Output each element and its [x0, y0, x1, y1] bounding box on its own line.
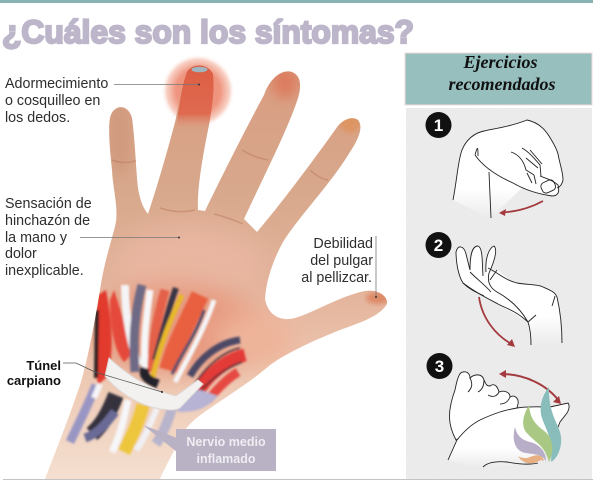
callout: carpal tunnel: carpiano	[7, 373, 61, 388]
top teal strip	[0, 0, 593, 3]
callout: swelling: Sensación de	[5, 196, 92, 212]
callout: swelling: dolor	[5, 246, 37, 262]
exercise 1	[453, 120, 563, 218]
callout: thumb weakness	[301, 236, 377, 298]
exercise 3	[448, 372, 569, 467]
callout: numbness: o cosquilleo en	[5, 93, 100, 109]
callout: carpal tunnel	[7, 358, 163, 393]
callout: thumb weakness: Debilidad	[313, 236, 373, 252]
number badge 1	[426, 112, 452, 138]
arrow 2	[479, 297, 513, 345]
white carpal ligament band	[105, 358, 203, 410]
callout: carpal tunnel: Túnel	[26, 358, 61, 373]
arrow 1	[501, 201, 543, 212]
callout: thumb weakness: al pellizcar.	[301, 270, 372, 286]
bottom rule	[3, 479, 593, 480]
finger creases	[112, 150, 328, 224]
callout: inflamed median nerve	[143, 425, 276, 471]
logo: coloured flames	[514, 387, 561, 463]
exercise 2	[456, 246, 562, 345]
panel header	[405, 52, 592, 105]
red fingertip	[177, 66, 214, 126]
lower forearm tendons	[70, 385, 96, 442]
callout: numbness: los dedos.	[5, 110, 70, 126]
callout: swelling: inexplicable.	[5, 263, 84, 279]
callout: swelling: la mano y	[5, 230, 68, 246]
hand silhouette	[45, 65, 387, 479]
callout: thumb weakness: del pulgar	[310, 253, 373, 269]
number badge 3: 3	[435, 357, 444, 376]
fingertip grey nail mark	[192, 67, 208, 72]
callout: inflamed median nerve: inflamado	[196, 452, 256, 466]
callout: inflamed median nerve: Nervio medio	[186, 435, 266, 449]
number badge 1: 1	[434, 116, 443, 135]
panel background	[406, 108, 592, 480]
panel header: Ejercicios	[462, 52, 538, 72]
panel: recommended exercises	[405, 52, 592, 480]
number badge 2: 2	[434, 236, 443, 255]
illustration: hand with carpal tunnel anatomy	[45, 54, 390, 479]
red glow around fingertip	[161, 54, 235, 128]
skin tones	[130, 227, 250, 272]
callout: numbness	[5, 76, 200, 126]
title: ¿Cuáles son los síntomas?	[2, 14, 414, 50]
callout: swelling: hinchazón de	[5, 213, 90, 229]
arrow 3	[501, 374, 559, 401]
panel header: recomendados	[448, 74, 556, 94]
callout: numbness: Adormecimiento	[5, 76, 108, 92]
number badge 2	[426, 232, 452, 258]
callout: swelling	[5, 196, 180, 279]
number badge 3	[426, 353, 452, 379]
muscles and tendons	[70, 285, 245, 452]
